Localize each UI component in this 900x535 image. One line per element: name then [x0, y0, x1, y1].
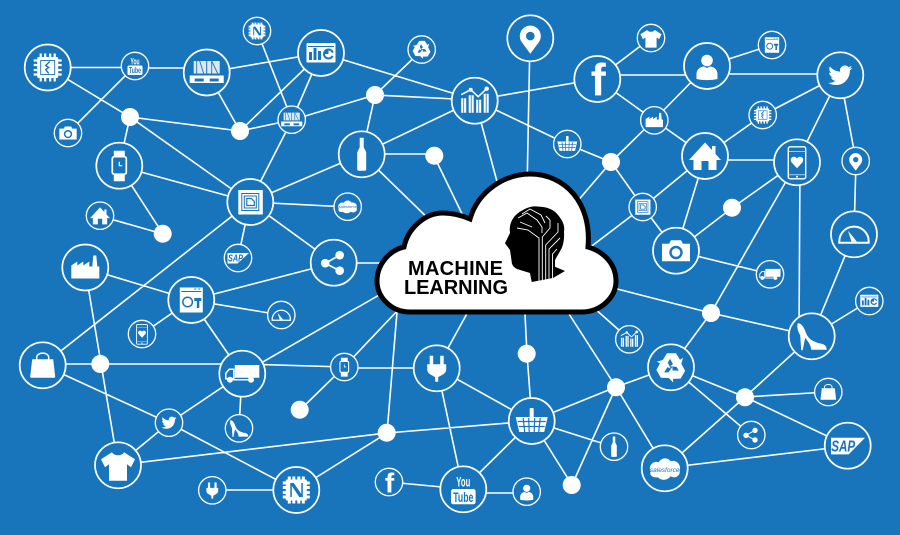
- icon: chart large: [452, 78, 498, 124]
- network connection lines: [43, 31, 869, 493]
- icon: plug large: [414, 345, 460, 391]
- icon: pallet small: [278, 106, 305, 133]
- icon: twitter large: [817, 52, 863, 98]
- icon: factory small: [641, 107, 668, 134]
- icon: recycle large: [648, 344, 694, 390]
- icon: dashboard large: [298, 30, 344, 76]
- icon: bottle small: [600, 433, 628, 460]
- icon: salesforce large: salesforce: [650, 467, 680, 474]
- dot nodes: [91, 86, 754, 494]
- icon: youtube small: Tube: [129, 65, 141, 75]
- icon: facebook large: f: [591, 55, 607, 106]
- icon: twitter small: [155, 409, 183, 436]
- icon: facebook small: [375, 467, 403, 498]
- icon: youtube small: You: [130, 56, 140, 66]
- icon: youtube small: [121, 52, 149, 80]
- icon: shoe large: [789, 313, 835, 359]
- icon: basket small: [554, 130, 581, 158]
- icon: user small: [513, 478, 540, 505]
- icon: rfid large: [227, 179, 273, 225]
- icon: phone small: [128, 320, 156, 348]
- icon: sap small: SAP: [228, 254, 243, 265]
- icon: facebook small: f: [385, 467, 395, 498]
- icon: phone large: [774, 139, 820, 185]
- icon: chip small: [749, 101, 776, 129]
- icon: watch small: [331, 353, 358, 381]
- icon: washer large: [168, 277, 214, 323]
- icon: house large: [682, 133, 728, 179]
- icon: nvidia chip large: [273, 467, 319, 513]
- icon: salesforce large: [642, 445, 688, 491]
- icon: basket large: [509, 398, 555, 444]
- icon: salesforce small: [334, 193, 361, 220]
- icon: bag large: [20, 342, 66, 388]
- icon: facebook large: [574, 55, 620, 106]
- icon: pallet large: [184, 50, 230, 96]
- icon: rfid small: [629, 193, 656, 221]
- icon: gauge small: [268, 301, 295, 329]
- icon: share small: [738, 421, 765, 449]
- icon: chart small: [616, 326, 643, 353]
- icon: location pin large: [507, 15, 553, 61]
- icon: camera large: [653, 228, 699, 274]
- icon: shirt large: [95, 442, 141, 488]
- icon: washer small: [758, 31, 786, 59]
- icon: user large: [684, 43, 730, 89]
- icon: nvidia chip small: [243, 17, 271, 45]
- head silhouette with circuit brain: [505, 206, 565, 282]
- icon: shirt small: [637, 24, 665, 52]
- icon: dashboard small: [856, 287, 883, 315]
- icon: share large: [311, 240, 357, 286]
- icon: plug small: [199, 477, 226, 504]
- icon: sap small: [224, 244, 252, 272]
- icon: camera small: [54, 119, 82, 147]
- icon: home small: [86, 202, 114, 229]
- central cloud: machine learning: [377, 174, 616, 312]
- icon: bottle large: [339, 131, 385, 177]
- icon: location pin small: [842, 147, 869, 175]
- machine learning label: MACHINE: [408, 258, 503, 280]
- icon: truck large: [219, 351, 265, 397]
- cloud shape: [377, 174, 616, 312]
- icon: recycle small: [408, 36, 435, 63]
- icon: bag small: [815, 378, 842, 406]
- central cloud: machine learning: LEARNING: [404, 277, 508, 299]
- icon: youtube large: Tube: [453, 490, 474, 505]
- icon: youtube large: [440, 466, 486, 512]
- icon: chip large: [25, 44, 71, 90]
- icon: sap large: [825, 423, 871, 469]
- icon: salesforce small: salesforce: [339, 204, 358, 209]
- icon: gauge large: [831, 211, 877, 257]
- icon: truck small: [756, 261, 784, 288]
- icon: shoe small: [225, 415, 253, 442]
- icon: factory large: [62, 244, 108, 290]
- icon: watch large: [96, 143, 142, 189]
- icon: sap large: SAP: [831, 439, 855, 456]
- icon: youtube large: You: [456, 473, 470, 489]
